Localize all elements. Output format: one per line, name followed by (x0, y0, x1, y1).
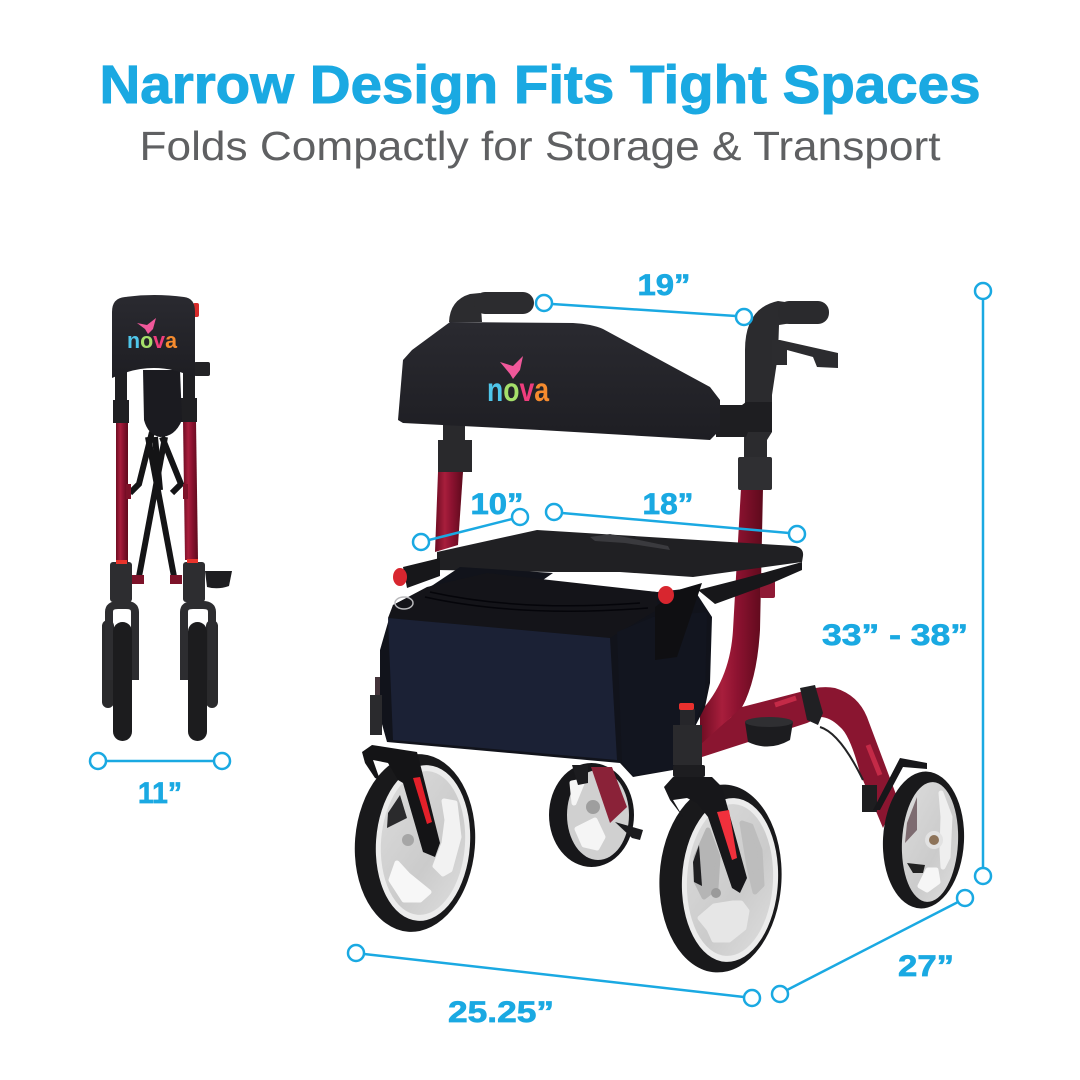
bag lid (388, 573, 657, 638)
side strap (655, 583, 702, 660)
folded backrest (112, 295, 195, 378)
folded bag (143, 370, 182, 437)
title: Narrow Design Fits Tight Spaces (100, 55, 980, 115)
brake lever (873, 758, 927, 810)
dimension: handle width 19" (536, 269, 752, 325)
side panel (617, 612, 707, 775)
rear right wheel (879, 769, 968, 911)
side bracket (760, 573, 775, 598)
rear frame leg (591, 767, 627, 823)
under-seat frame (698, 562, 802, 604)
front left fork (362, 745, 440, 857)
lower blocks (110, 562, 205, 602)
right reflector (717, 810, 737, 860)
red brackets (126, 484, 188, 584)
dimension: handle width 19": 19” (638, 269, 690, 302)
frame highlights (712, 698, 880, 775)
dimension: folded width 11": 11” (138, 777, 182, 810)
red tubes (116, 420, 198, 563)
right grip (778, 301, 829, 324)
seat handle (590, 534, 670, 550)
dimension: height 33" - 38" (822, 283, 991, 884)
zipper seams (425, 592, 648, 611)
left red pin (375, 677, 380, 695)
hinge box (194, 362, 210, 376)
brake block (862, 785, 877, 812)
front left wheel (348, 750, 482, 936)
left grip (449, 292, 534, 322)
bag (380, 567, 712, 777)
right post stem (680, 709, 695, 725)
left red knob (393, 568, 407, 586)
dimension: overall width 27" (772, 890, 973, 1002)
main upright tube (700, 488, 763, 745)
seat (437, 530, 803, 577)
left reflector (413, 777, 432, 824)
dimension: overall depth 25.25" (348, 945, 760, 1029)
dimension: height 33" - 38": 33” - 38” (822, 619, 968, 652)
right red pin (679, 703, 694, 710)
left seat rod (403, 558, 440, 588)
front panel (388, 618, 617, 760)
black sleeves (113, 372, 197, 423)
right post collar (673, 765, 705, 777)
right sleeve (738, 457, 772, 490)
folded walker photo (102, 295, 232, 741)
dimension: overall width 27": 27” (898, 950, 954, 983)
dimension: folded width 11" (90, 753, 230, 810)
dimension: seat width 18" (546, 488, 805, 542)
left sleeve (438, 425, 472, 472)
right wheel post (673, 725, 702, 765)
rear bracket (572, 765, 588, 785)
right post (744, 301, 792, 458)
dimension: seat depth 10": 10” (470, 488, 524, 521)
left wheel post (370, 695, 382, 735)
front wheels (113, 622, 207, 741)
cross frame (130, 432, 181, 582)
brake handle (772, 340, 838, 368)
front right fork (664, 777, 747, 893)
red caps (116, 559, 198, 564)
brake foot (615, 822, 643, 840)
subtitle: Folds Compactly for Storage & Transport (140, 123, 941, 169)
main walker photo (348, 292, 968, 976)
logo (487, 356, 550, 408)
backrest clamp (700, 402, 772, 437)
dimension: overall depth 25.25": 25.25” (448, 996, 554, 1029)
wheel forks (109, 605, 212, 680)
left upright tube (435, 472, 463, 552)
rear frame leg and lower frame (700, 670, 897, 828)
cup holder (205, 571, 232, 588)
front right wheel (655, 781, 786, 976)
logo small: nova (127, 328, 178, 353)
dimension: seat depth 10" (413, 488, 528, 550)
red knob (193, 303, 199, 317)
brake cable (820, 727, 863, 780)
dimension: seat width 18": 18” (642, 488, 694, 521)
frame clamp (800, 685, 823, 725)
logo: nova (487, 371, 550, 408)
rear center wheel (549, 763, 634, 867)
cup holder (745, 717, 793, 747)
zipper ring (395, 597, 413, 609)
right red knob (658, 586, 674, 604)
rear wheels (102, 620, 218, 708)
backrest (398, 322, 720, 440)
